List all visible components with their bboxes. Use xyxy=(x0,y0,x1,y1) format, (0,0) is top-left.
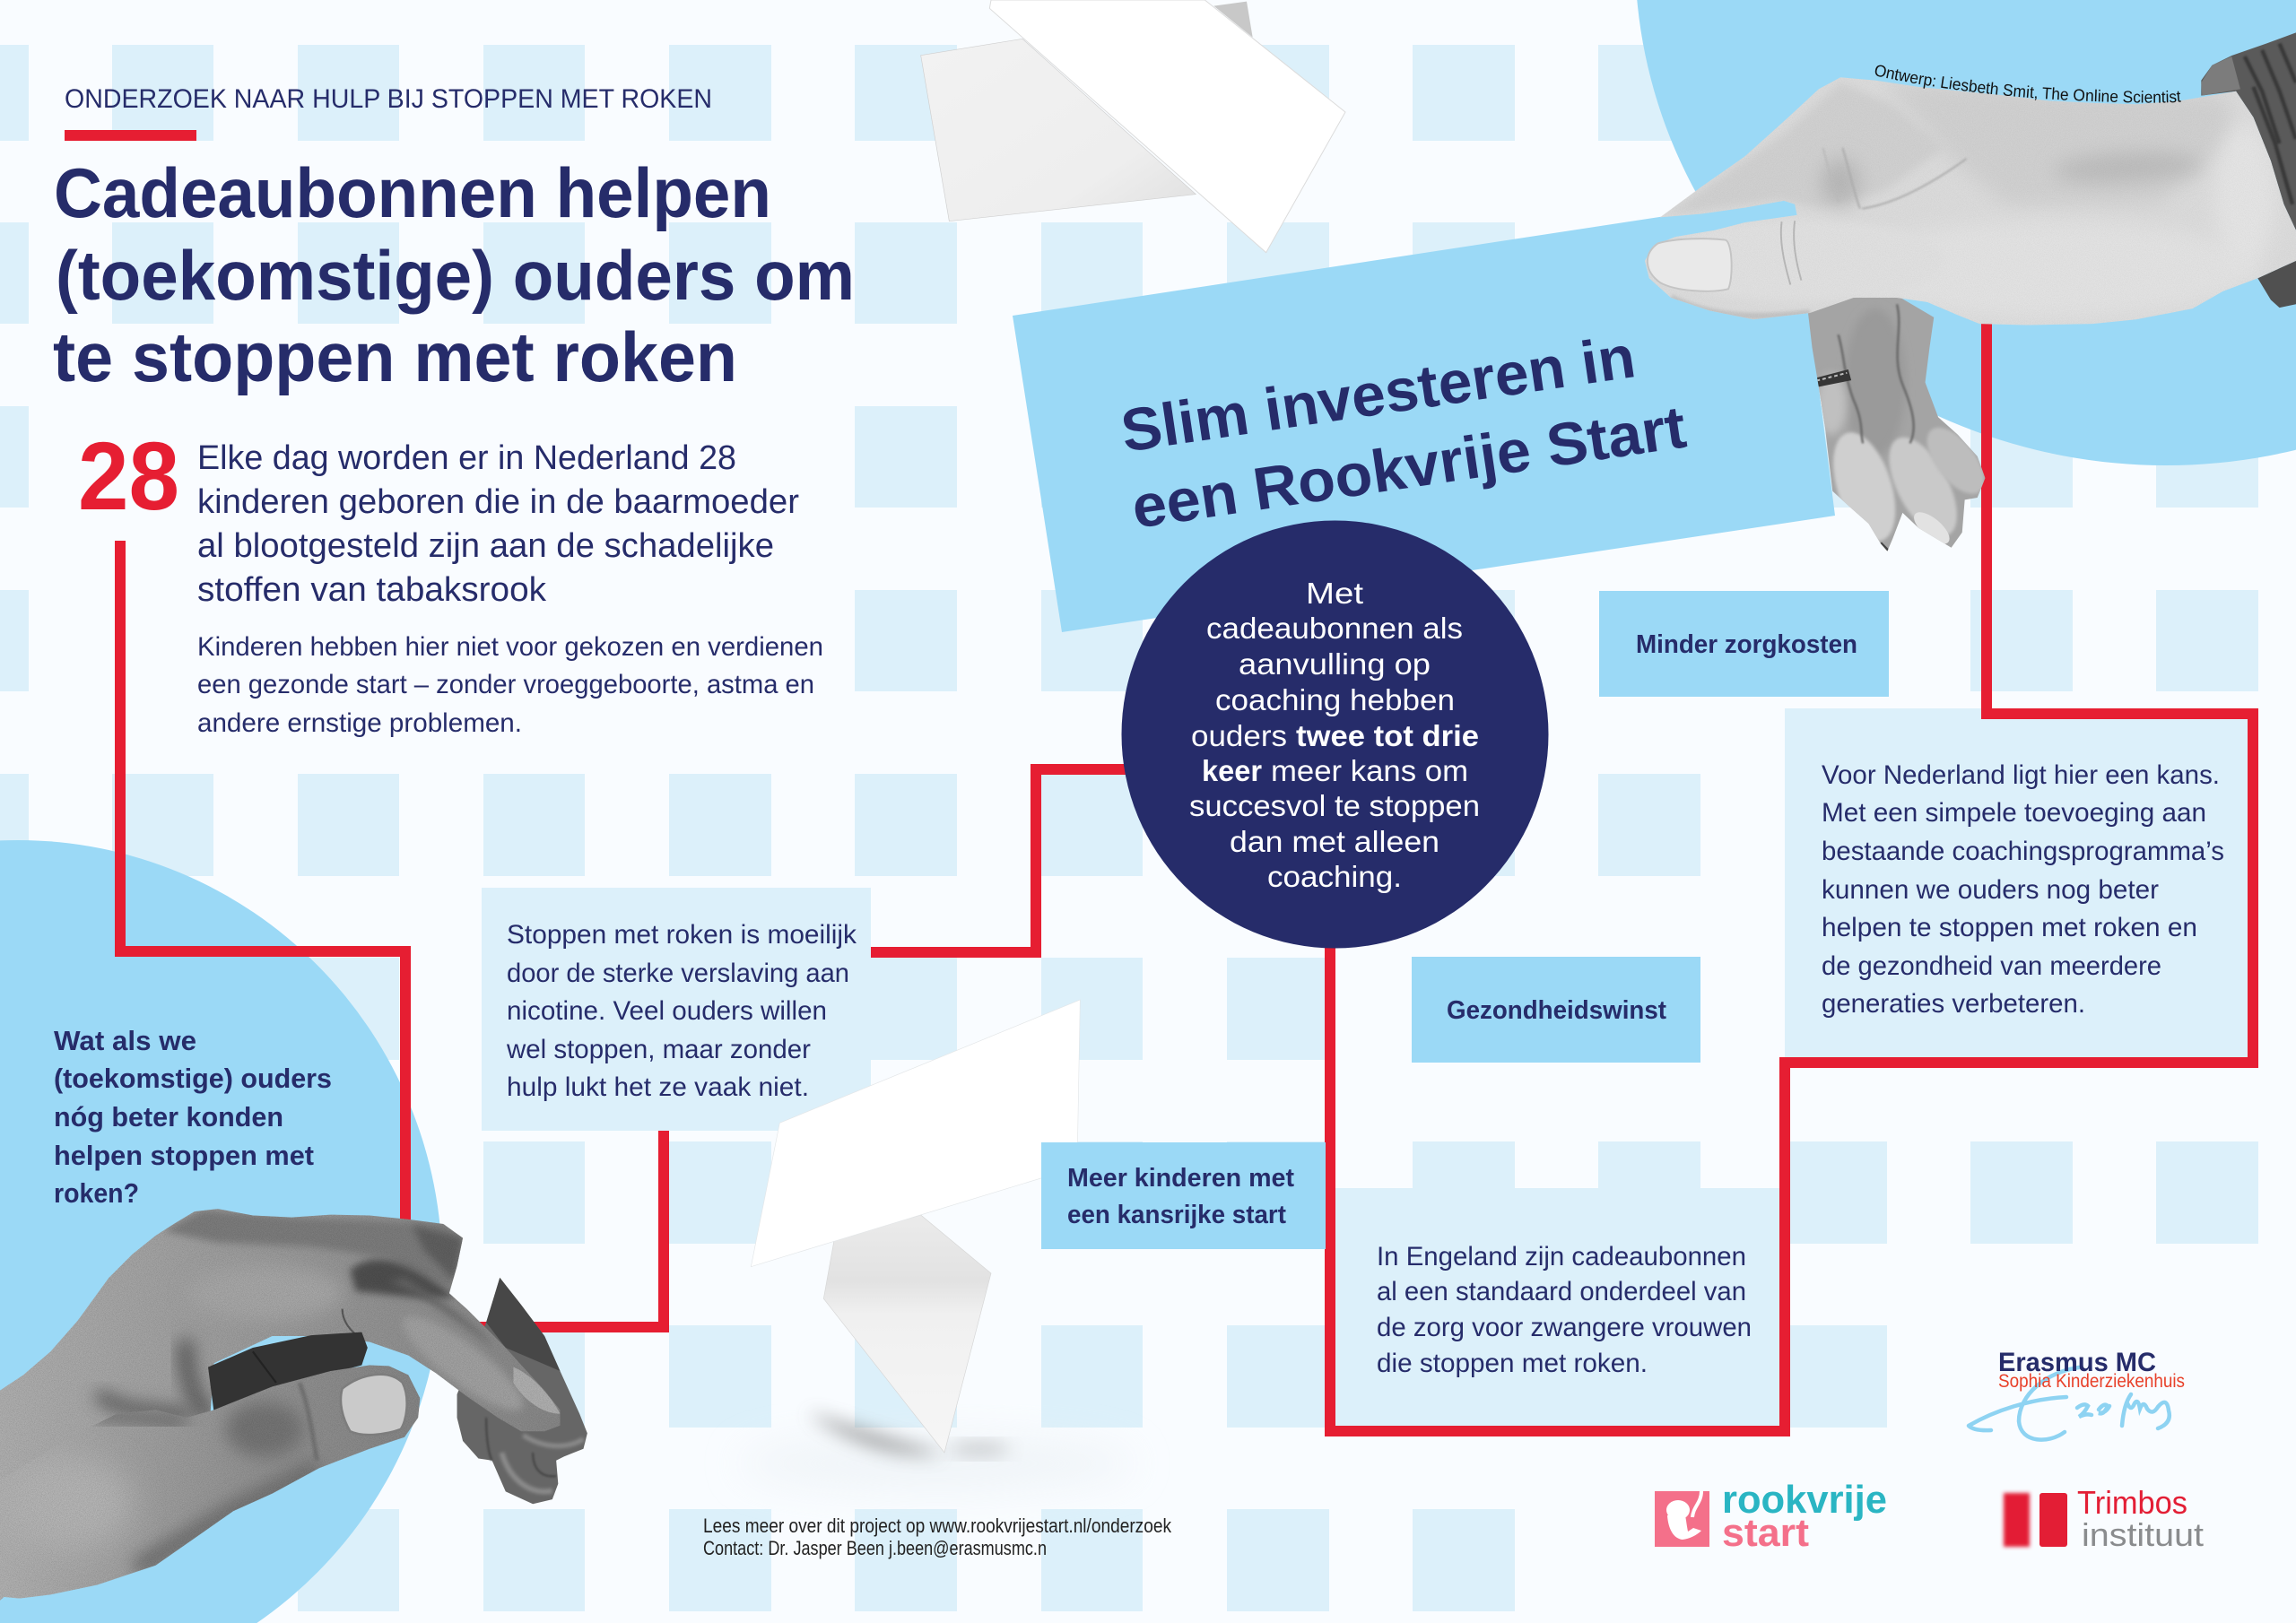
shadow between fingers and thumb xyxy=(208,1332,368,1412)
red connector lines xyxy=(120,305,2253,1431)
hand and thumb xyxy=(1645,77,2296,325)
label: meer kinderen: Meer kinderen met xyxy=(1067,1164,1294,1193)
main title: (toekomstige) ouders om xyxy=(56,236,855,315)
text box: Nederland: generaties verbeteren. xyxy=(1822,989,2085,1019)
secondary paragraph: Kinderen hebben hier niet voor gekozen en verdienen xyxy=(197,632,823,662)
big number 28: 28 xyxy=(78,421,179,530)
navy circle with key message: succesvol te stoppen xyxy=(1189,789,1480,822)
main title xyxy=(53,153,855,396)
label: minder zorgkosten xyxy=(1599,591,1889,697)
navy circle with key message: meer kans om xyxy=(1271,754,1468,787)
intro paragraph: Elke dag worden er in Nederland 28 xyxy=(197,439,736,477)
logo: Trimbos instituut: instituut xyxy=(2082,1516,2204,1553)
footer contact text: Lees meer over dit project op www.rookvrijestart.nl/onderzoek xyxy=(703,1515,1172,1537)
thumbnail xyxy=(1648,239,1732,291)
text box: Engeland xyxy=(1335,1188,1779,1426)
secondary paragraph: andere ernstige problemen. xyxy=(197,708,522,738)
navy circle with key message: cadeaubonnen als xyxy=(1206,612,1463,645)
question on blue circle: nóg beter konden xyxy=(54,1101,283,1133)
logo: Erasmus MC xyxy=(1969,1348,2185,1440)
tilted blue card with heading: een Rookvrije Start xyxy=(1127,394,1691,542)
navy circle with key message xyxy=(1121,520,1548,949)
question on blue circle: helpen stoppen met xyxy=(54,1140,314,1171)
label: minder zorgkosten: Minder zorgkosten xyxy=(1636,630,1857,659)
tilted blue card with heading xyxy=(1013,196,1835,632)
text box: Nederland xyxy=(1785,708,2248,1057)
label: gezondheidswinst xyxy=(1412,957,1700,1063)
hand top right holding card xyxy=(1614,32,2296,556)
eyebrow heading: ONDERZOEK NAAR HULP BIJ STOPPEN MET ROKEN xyxy=(65,84,712,114)
secondary paragraph: een gezonde start – zonder vroeggeboorte, astma en xyxy=(197,670,814,699)
eyebrow heading xyxy=(65,84,712,141)
label: gezondheidswinst: Gezondheidswinst xyxy=(1447,996,1666,1025)
navy circle with key message: twee tot drie xyxy=(1296,719,1479,752)
navy circle with key message: coaching. xyxy=(1267,860,1402,893)
tilted blue card with heading: Slim investeren in xyxy=(1117,323,1639,465)
text box: stoppen is moeilijk: door de sterke verslaving aan xyxy=(507,959,849,988)
hand bottom left holding paper xyxy=(0,1200,587,1604)
text box: Nederland: de gezondheid van meerdere xyxy=(1822,951,2161,981)
paper: falling folded sheet with shadow xyxy=(740,1000,1135,1490)
text box: Nederland: Voor Nederland ligt hier een kans. xyxy=(1822,760,2220,790)
text box: Nederland: bestaande coachingsprogramma’s xyxy=(1822,837,2224,866)
paper: top folded sheet xyxy=(921,0,1345,253)
question on blue circle: Wat als we xyxy=(54,1025,196,1056)
logo: Erasmus MC: Erasmus MC xyxy=(1998,1348,2156,1377)
navy circle with key message: coaching hebben xyxy=(1215,683,1455,716)
design credit curved along hand: Ontwerp: Liesbeth Smit, The Online Scientist xyxy=(1874,65,2181,103)
sleeve xyxy=(2201,32,2296,308)
text box: stoppen is moeilijk: nicotine. Veel ouders willen xyxy=(507,996,827,1026)
secondary paragraph xyxy=(197,632,823,738)
navy circle with key message: dan met alleen xyxy=(1230,825,1439,858)
blue circle top right xyxy=(1635,0,2296,465)
main title: te stoppen met roken xyxy=(53,317,737,396)
intro paragraph: stoffen van tabaksrook xyxy=(197,571,547,609)
main title: Cadeaubonnen helpen xyxy=(54,153,771,232)
text box: Nederland: helpen te stoppen met roken en xyxy=(1822,913,2197,942)
text box: stoppen is moeilijk: hulp lukt het ze vaak niet. xyxy=(507,1072,809,1102)
hand back and index finger xyxy=(0,1200,584,1604)
navy circle with key message: Met xyxy=(1306,577,1363,610)
text box: Nederland: kunnen we ouders nog beter xyxy=(1822,875,2159,905)
fingers below the thumb xyxy=(1808,298,1986,551)
question on blue circle: roken? xyxy=(54,1177,139,1209)
logo: Rookvrije Start: start xyxy=(1722,1511,1809,1555)
label: meer kinderen xyxy=(1041,1142,1326,1249)
footer contact text: Contact: Dr. Jasper Been j.been@erasmusmc.n xyxy=(703,1537,1047,1559)
logo: Trimbos instituut: Trimbos xyxy=(2077,1484,2187,1521)
footer contact text xyxy=(703,1515,1172,1559)
text box: Engeland: In Engeland zijn cadeaubonnen xyxy=(1377,1242,1746,1271)
text box: stoppen is moeilijk xyxy=(482,888,871,1131)
text box: Engeland: de zorg voor zwangere vrouwen xyxy=(1377,1313,1752,1342)
logo: Trimbos instituut xyxy=(2004,1484,2204,1553)
navy circle with key message: ouders xyxy=(1191,719,1287,752)
logo: Rookvrije Start xyxy=(1655,1478,1887,1555)
intro paragraph: al blootgesteld zijn aan de schadelijke xyxy=(197,527,774,565)
thumb xyxy=(0,1356,428,1604)
navy circle with key message: aanvulling op xyxy=(1239,647,1431,681)
blue circle bottom left xyxy=(0,840,442,1623)
intro paragraph xyxy=(197,439,799,609)
question on blue circle xyxy=(54,1025,332,1209)
text box: Engeland: die stoppen met roken. xyxy=(1377,1349,1648,1378)
text box: stoppen is moeilijk: Stoppen met roken is moeilijk xyxy=(507,920,857,950)
text box: Engeland: al een standaard onderdeel van xyxy=(1377,1277,1746,1306)
question on blue circle: (toekomstige) ouders xyxy=(54,1063,332,1094)
back fingers and dark paper fragment xyxy=(457,1278,587,1504)
logo: Rookvrije Start: rookvrije xyxy=(1722,1478,1887,1522)
intro paragraph: kinderen geboren die in de baarmoeder xyxy=(197,483,799,521)
navy circle with key message: keer xyxy=(1202,754,1262,787)
label: meer kinderen: een kansrijke start xyxy=(1067,1201,1286,1229)
logo: Erasmus MC: Sophia Kinderziekenhuis xyxy=(1998,1371,2185,1392)
text box: Nederland: Met een simpele toevoeging aan xyxy=(1822,798,2206,828)
text box: stoppen is moeilijk: wel stoppen, maar zonder xyxy=(506,1035,811,1064)
